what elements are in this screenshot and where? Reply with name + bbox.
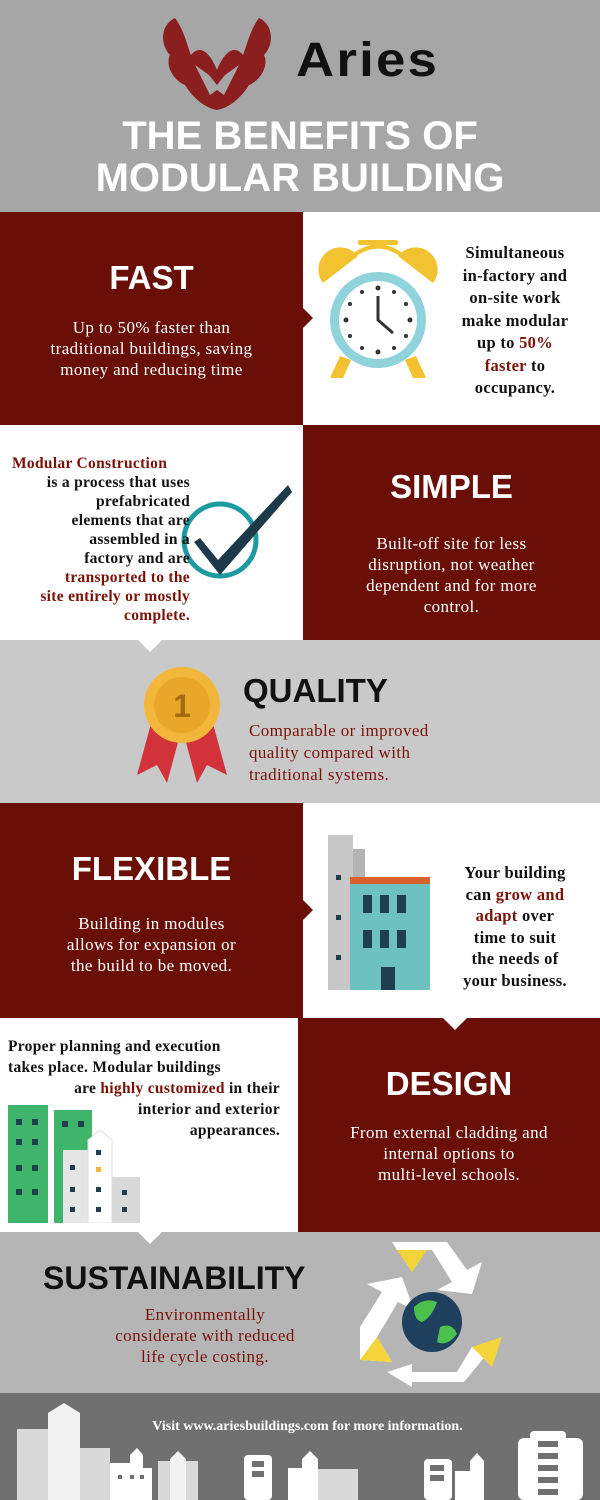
text: flexible detail: the needs of [471,949,558,968]
panel: simple: SIMPLE [390,468,513,505]
panel: design [298,1018,600,1232]
arrow down [138,640,162,652]
footer buildings [17,1403,583,1500]
panel: flexible: FLEXIBLE [72,850,231,887]
text: fast detail [462,243,568,397]
panel: flexible: allows for expansion or [67,935,236,954]
footer text: Visit www.ariesbuildings.com for more information. [152,1419,463,1434]
title: MODULAR BUILDING [96,156,504,200]
text: fast detail: in-factory and [463,266,567,284]
text: flexible detail: adapt over [476,906,554,925]
text: flexible detail: time to suit [474,928,556,946]
text: definition: transported to the [65,569,190,586]
text: definition: Modular Construction [12,455,167,472]
text: definition: elements that are [72,512,190,529]
panel: sustainability: considerate with reduced [115,1326,295,1345]
panel: design: internal options to [383,1144,515,1163]
text: definition: assembled in a [89,531,190,548]
panel: simple: dependent and for more [366,576,537,595]
panel: flexible: the build to be moved. [71,956,232,975]
text: definition: prefabricated [96,493,190,510]
panel: quality: quality compared with [249,743,410,762]
text: design detail: are highly customized in their [74,1080,280,1097]
panel: sustainability [0,1232,600,1393]
title: THE BENEFITS OF [122,114,478,158]
icon: check mark [182,485,292,578]
text: fast detail: occupancy. [475,378,555,397]
icon: recycle globe [360,1242,502,1387]
text: fast detail: make modular [462,310,568,330]
text: flexible detail: your business. [463,970,567,990]
panel: fast [0,212,303,425]
panel: quality: traditional systems. [249,765,389,784]
text: flexible detail: can grow and [466,884,564,904]
text: fast detail: Simultaneous [466,243,564,262]
text: definition: factory and are [84,550,190,567]
text: fast detail: faster to [485,356,545,374]
icon: buildings [8,1105,140,1223]
panel: design: multi-level schools. [378,1165,520,1184]
text: definition: complete. [124,607,190,624]
text: definition: site entirely or mostly [40,588,190,605]
panel: quality: QUALITY [243,672,388,709]
logo: Aries wordmark: Aries [296,34,439,87]
panel: design: DESIGN [386,1065,512,1102]
text: definition [12,455,190,624]
icon: medal [137,667,227,783]
icon: building [328,835,430,990]
logo: ram icon [163,18,271,110]
panel: fast: traditional buildings, saving [51,339,252,358]
header [0,0,600,212]
text: definition: is a process that uses [47,474,190,491]
panel: simple: Built-off site for less [376,534,527,553]
title [96,114,504,200]
panel: fast: FAST [109,259,194,296]
text: design detail: appearances. [190,1122,280,1139]
panel: simple: disruption, not weather [368,555,535,574]
panel: simple [303,425,600,640]
text: fast detail: on-site work [469,288,561,307]
panel: flexible: Building in modules [78,914,225,933]
text: flexible detail [463,863,567,990]
text: flexible detail: Your building [464,863,566,882]
footer [0,1393,600,1500]
panel: quality: Comparable or improved [249,721,429,740]
panel: fast: Up to 50% faster than [73,318,230,337]
panel: sustainability: life cycle costing. [141,1347,269,1366]
panel: simple: control. [424,597,479,616]
icon: medal: 1 [173,688,191,724]
panel: fast: money and reducing time [60,360,243,379]
arrow down [443,425,467,437]
panel: design: From external cladding and [350,1123,548,1142]
text: design detail: Proper planning and execution [8,1038,221,1055]
text: fast detail: up to 50% [477,333,553,352]
panel: flexible [0,803,303,1018]
panel: quality [0,640,600,803]
arrow [303,308,313,328]
panel: sustainability: Environmentally [145,1305,265,1324]
panel: sustainability: SUSTAINABILITY [43,1260,306,1296]
text: design detail: interior and exterior [138,1101,280,1118]
text: design detail [8,1038,280,1139]
icon: alarm clock [318,240,438,378]
text: design detail: takes place. Modular buildings [8,1059,221,1076]
